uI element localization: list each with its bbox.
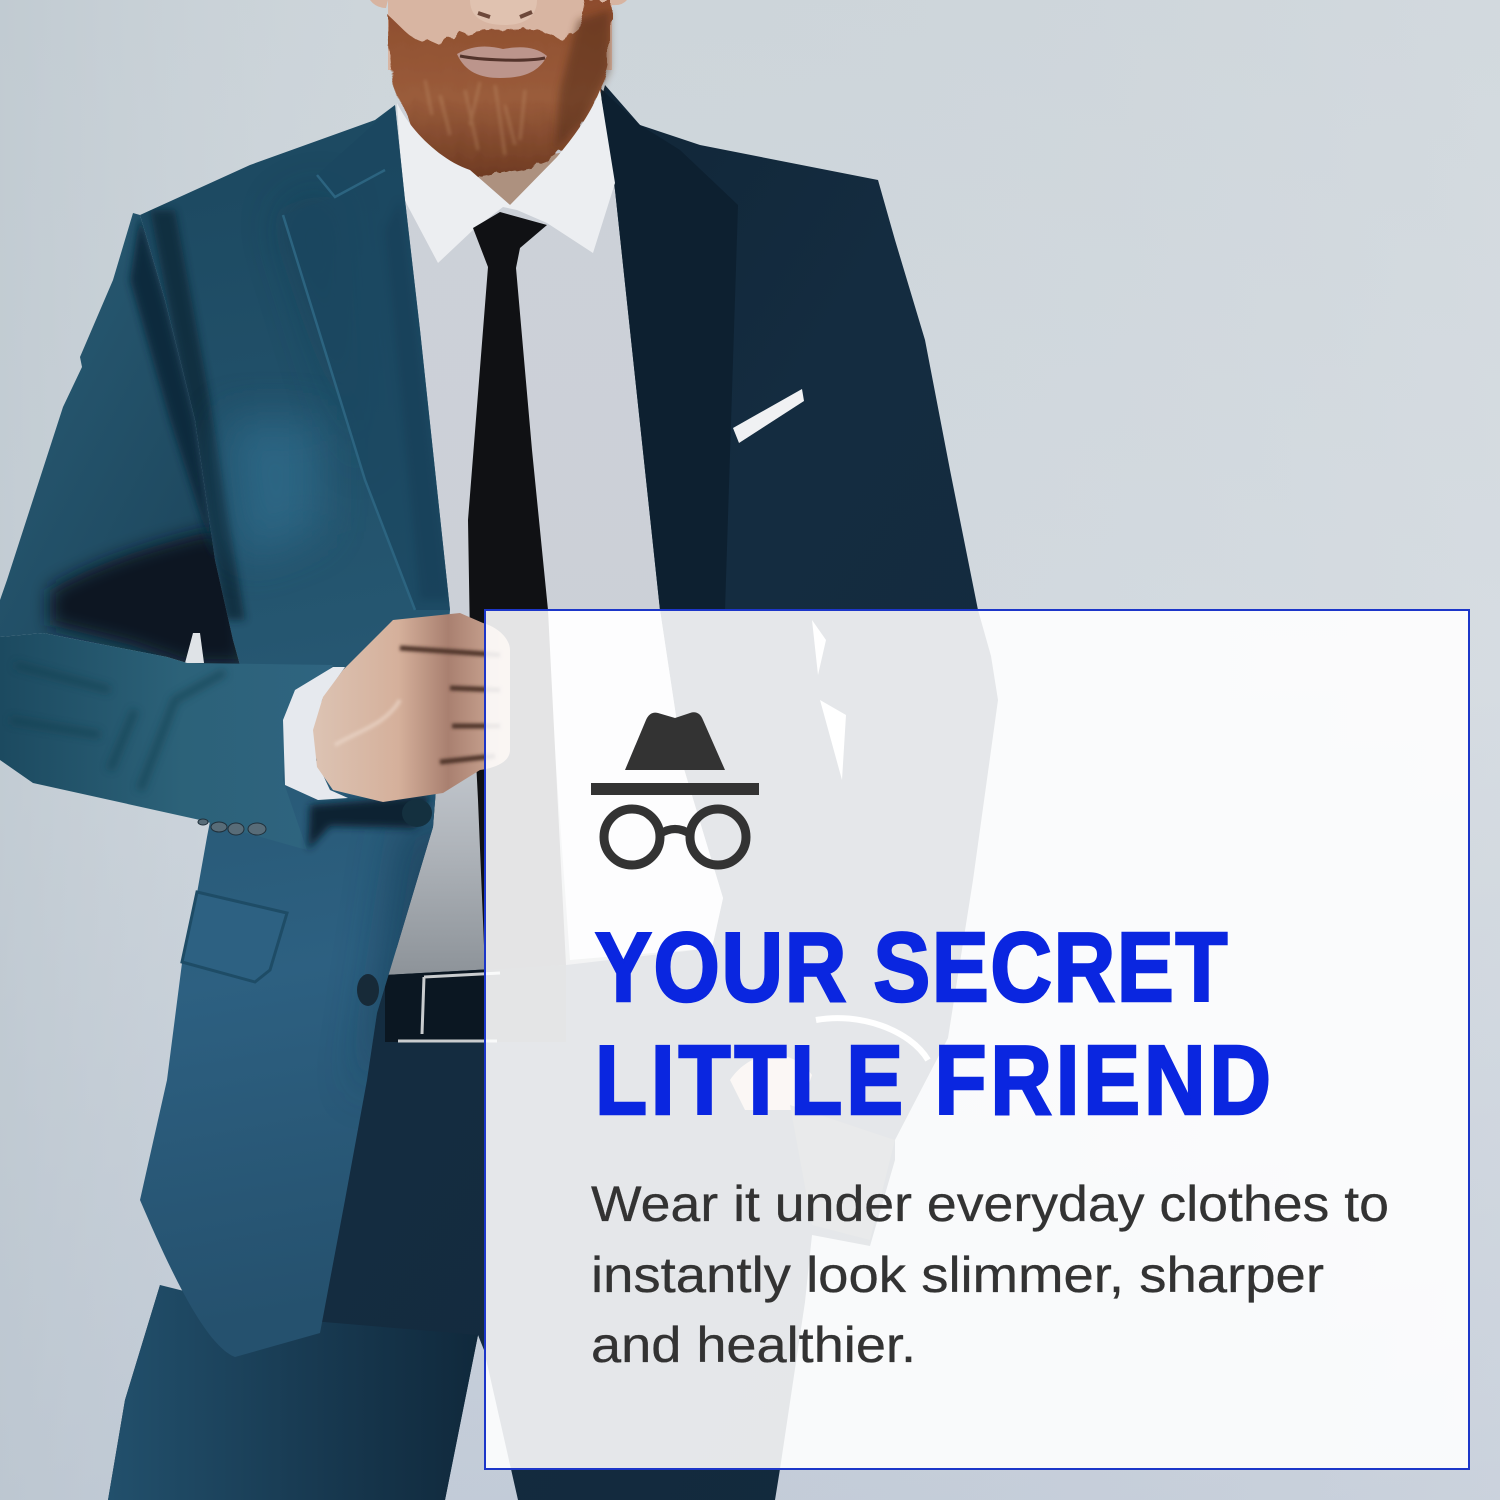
lips (457, 47, 547, 78)
shirt slivers seen through panel (812, 620, 846, 780)
heading: LITTLE FRIEND (595, 1027, 1271, 1135)
sleeve buttons (198, 819, 266, 835)
tie (468, 212, 566, 970)
ears (370, 0, 627, 8)
beard highlights (425, 80, 525, 155)
shirt sliver (185, 633, 204, 663)
hand vein (335, 700, 400, 745)
photo: man in navy suit (0, 0, 998, 1500)
mouth line (460, 56, 545, 60)
heading: YOUR SECRET (595, 914, 1227, 1022)
body text: Wear it under everyday clothes to (591, 1176, 1389, 1232)
belt buckle (398, 973, 500, 1041)
dark fold under arm (50, 215, 245, 665)
heading (595, 914, 1271, 1135)
shirt (385, 90, 723, 975)
hand finger lines (400, 648, 500, 762)
lower face (388, 0, 612, 70)
pocket flap (182, 892, 287, 982)
left jacket body (140, 105, 450, 1357)
jacket shading (150, 190, 460, 1100)
nose (470, 0, 537, 25)
cuff (283, 667, 348, 800)
body text: and healthier. (591, 1317, 916, 1373)
pocket square (733, 389, 804, 443)
panel: translucent text card (485, 610, 1469, 1469)
lapel stitching (283, 170, 415, 610)
sleeve folds (10, 665, 225, 790)
wrist and watch seen through panel (730, 1018, 928, 1240)
icon: incognito hat and glasses (591, 712, 759, 865)
belt (385, 965, 566, 1042)
forearm sleeve (0, 633, 333, 850)
collar (397, 90, 615, 263)
upper left arm (0, 213, 240, 665)
hand (313, 613, 510, 802)
right lapel (600, 88, 738, 610)
shirt lower highlight behind panel (545, 610, 723, 960)
beard dark side (555, 10, 610, 150)
left lapel (283, 105, 450, 610)
jacket lower button (357, 974, 379, 1006)
nostril shadow (478, 12, 532, 17)
beard (388, 0, 610, 178)
dark suit body, right jacket and trousers (108, 85, 998, 1500)
dark shadow under cuff (308, 795, 430, 850)
left trouser leg (108, 1285, 478, 1500)
body text: instantly look slimmer, sharper (591, 1247, 1324, 1303)
neck (470, 150, 575, 205)
jacket button top (402, 799, 432, 827)
